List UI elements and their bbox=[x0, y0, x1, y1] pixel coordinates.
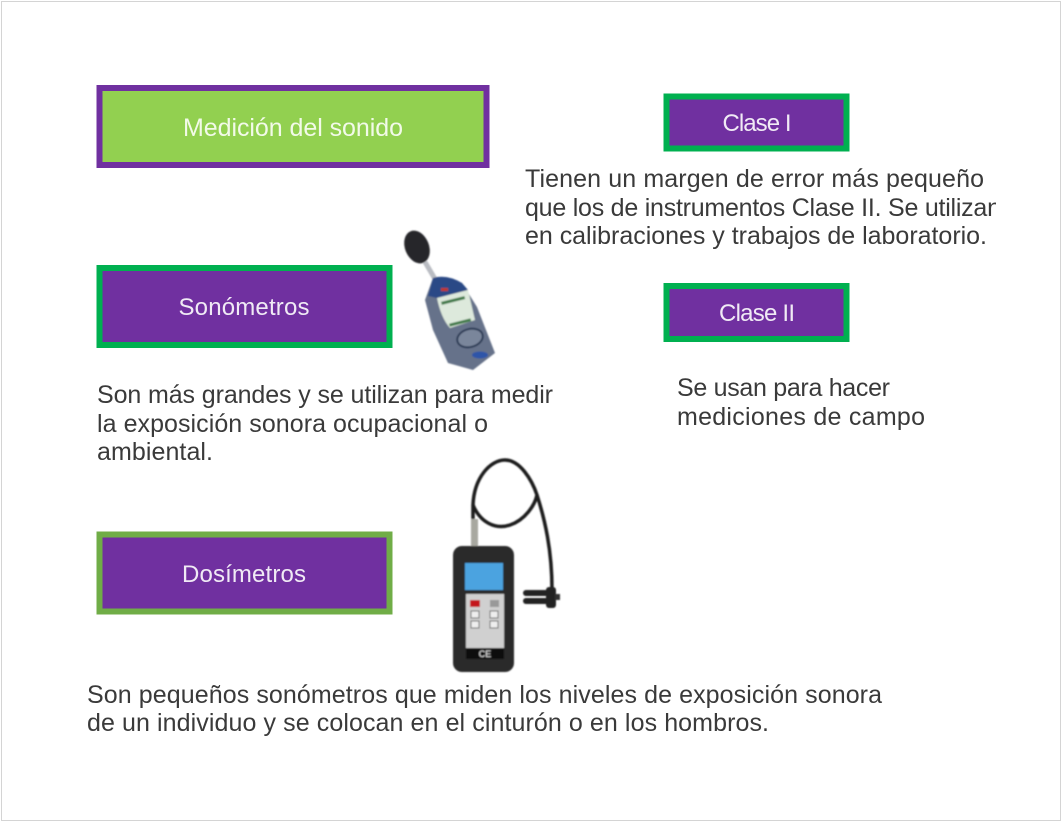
icon: dosimeter: CE bbox=[479, 649, 491, 659]
icon: sound level meter bbox=[400, 227, 495, 370]
heading box: Clase II bbox=[666, 286, 846, 339]
text: Clase II description: Se usan para hacer bbox=[677, 374, 890, 402]
text: Clase II description bbox=[677, 374, 925, 431]
text: Clase I description: en calibraciones y trabajos de laboratorio. bbox=[525, 222, 987, 250]
text: Sonómetros description: ambiental. bbox=[97, 438, 213, 466]
heading box: Clase I: Clase I bbox=[722, 110, 792, 137]
text: Clase I description bbox=[525, 165, 1001, 250]
text: Sonómetros description: la exposición sonora ocupacional o bbox=[97, 410, 488, 438]
heading box: Dosímetros: Dosímetros bbox=[182, 561, 306, 588]
text: Sonómetros description: Son más grandes y se utilizan para medir bbox=[97, 381, 553, 409]
heading box: Clase I bbox=[666, 96, 846, 148]
icon: dosimeter bbox=[453, 460, 560, 672]
heading box: Sonómetros: Sonómetros bbox=[178, 294, 310, 321]
text: Sonómetros description bbox=[97, 381, 553, 466]
heading box: Sonómetros bbox=[100, 268, 390, 345]
title box: Medición del sonido: Medición del sonido bbox=[183, 114, 403, 142]
text: Dosímetros description: Son pequeños sonómetros que miden los niveles de exposición sonora bbox=[87, 681, 882, 709]
heading box: Clase II: Clase II bbox=[719, 300, 795, 327]
text: Clase I description: que los de instrumentos Clase II. Se utilizan bbox=[525, 194, 1001, 222]
text: Clase II description: mediciones de campo bbox=[677, 403, 925, 431]
heading box: Dosímetros bbox=[100, 534, 390, 612]
title box: Medición del sonido bbox=[100, 88, 486, 165]
text: Dosímetros description bbox=[87, 681, 882, 737]
text: Dosímetros description: de un individuo y se colocan en el cinturón o en los hombros. bbox=[87, 709, 769, 737]
text: Clase I description: Tienen un margen de error más pequeño bbox=[525, 165, 984, 193]
